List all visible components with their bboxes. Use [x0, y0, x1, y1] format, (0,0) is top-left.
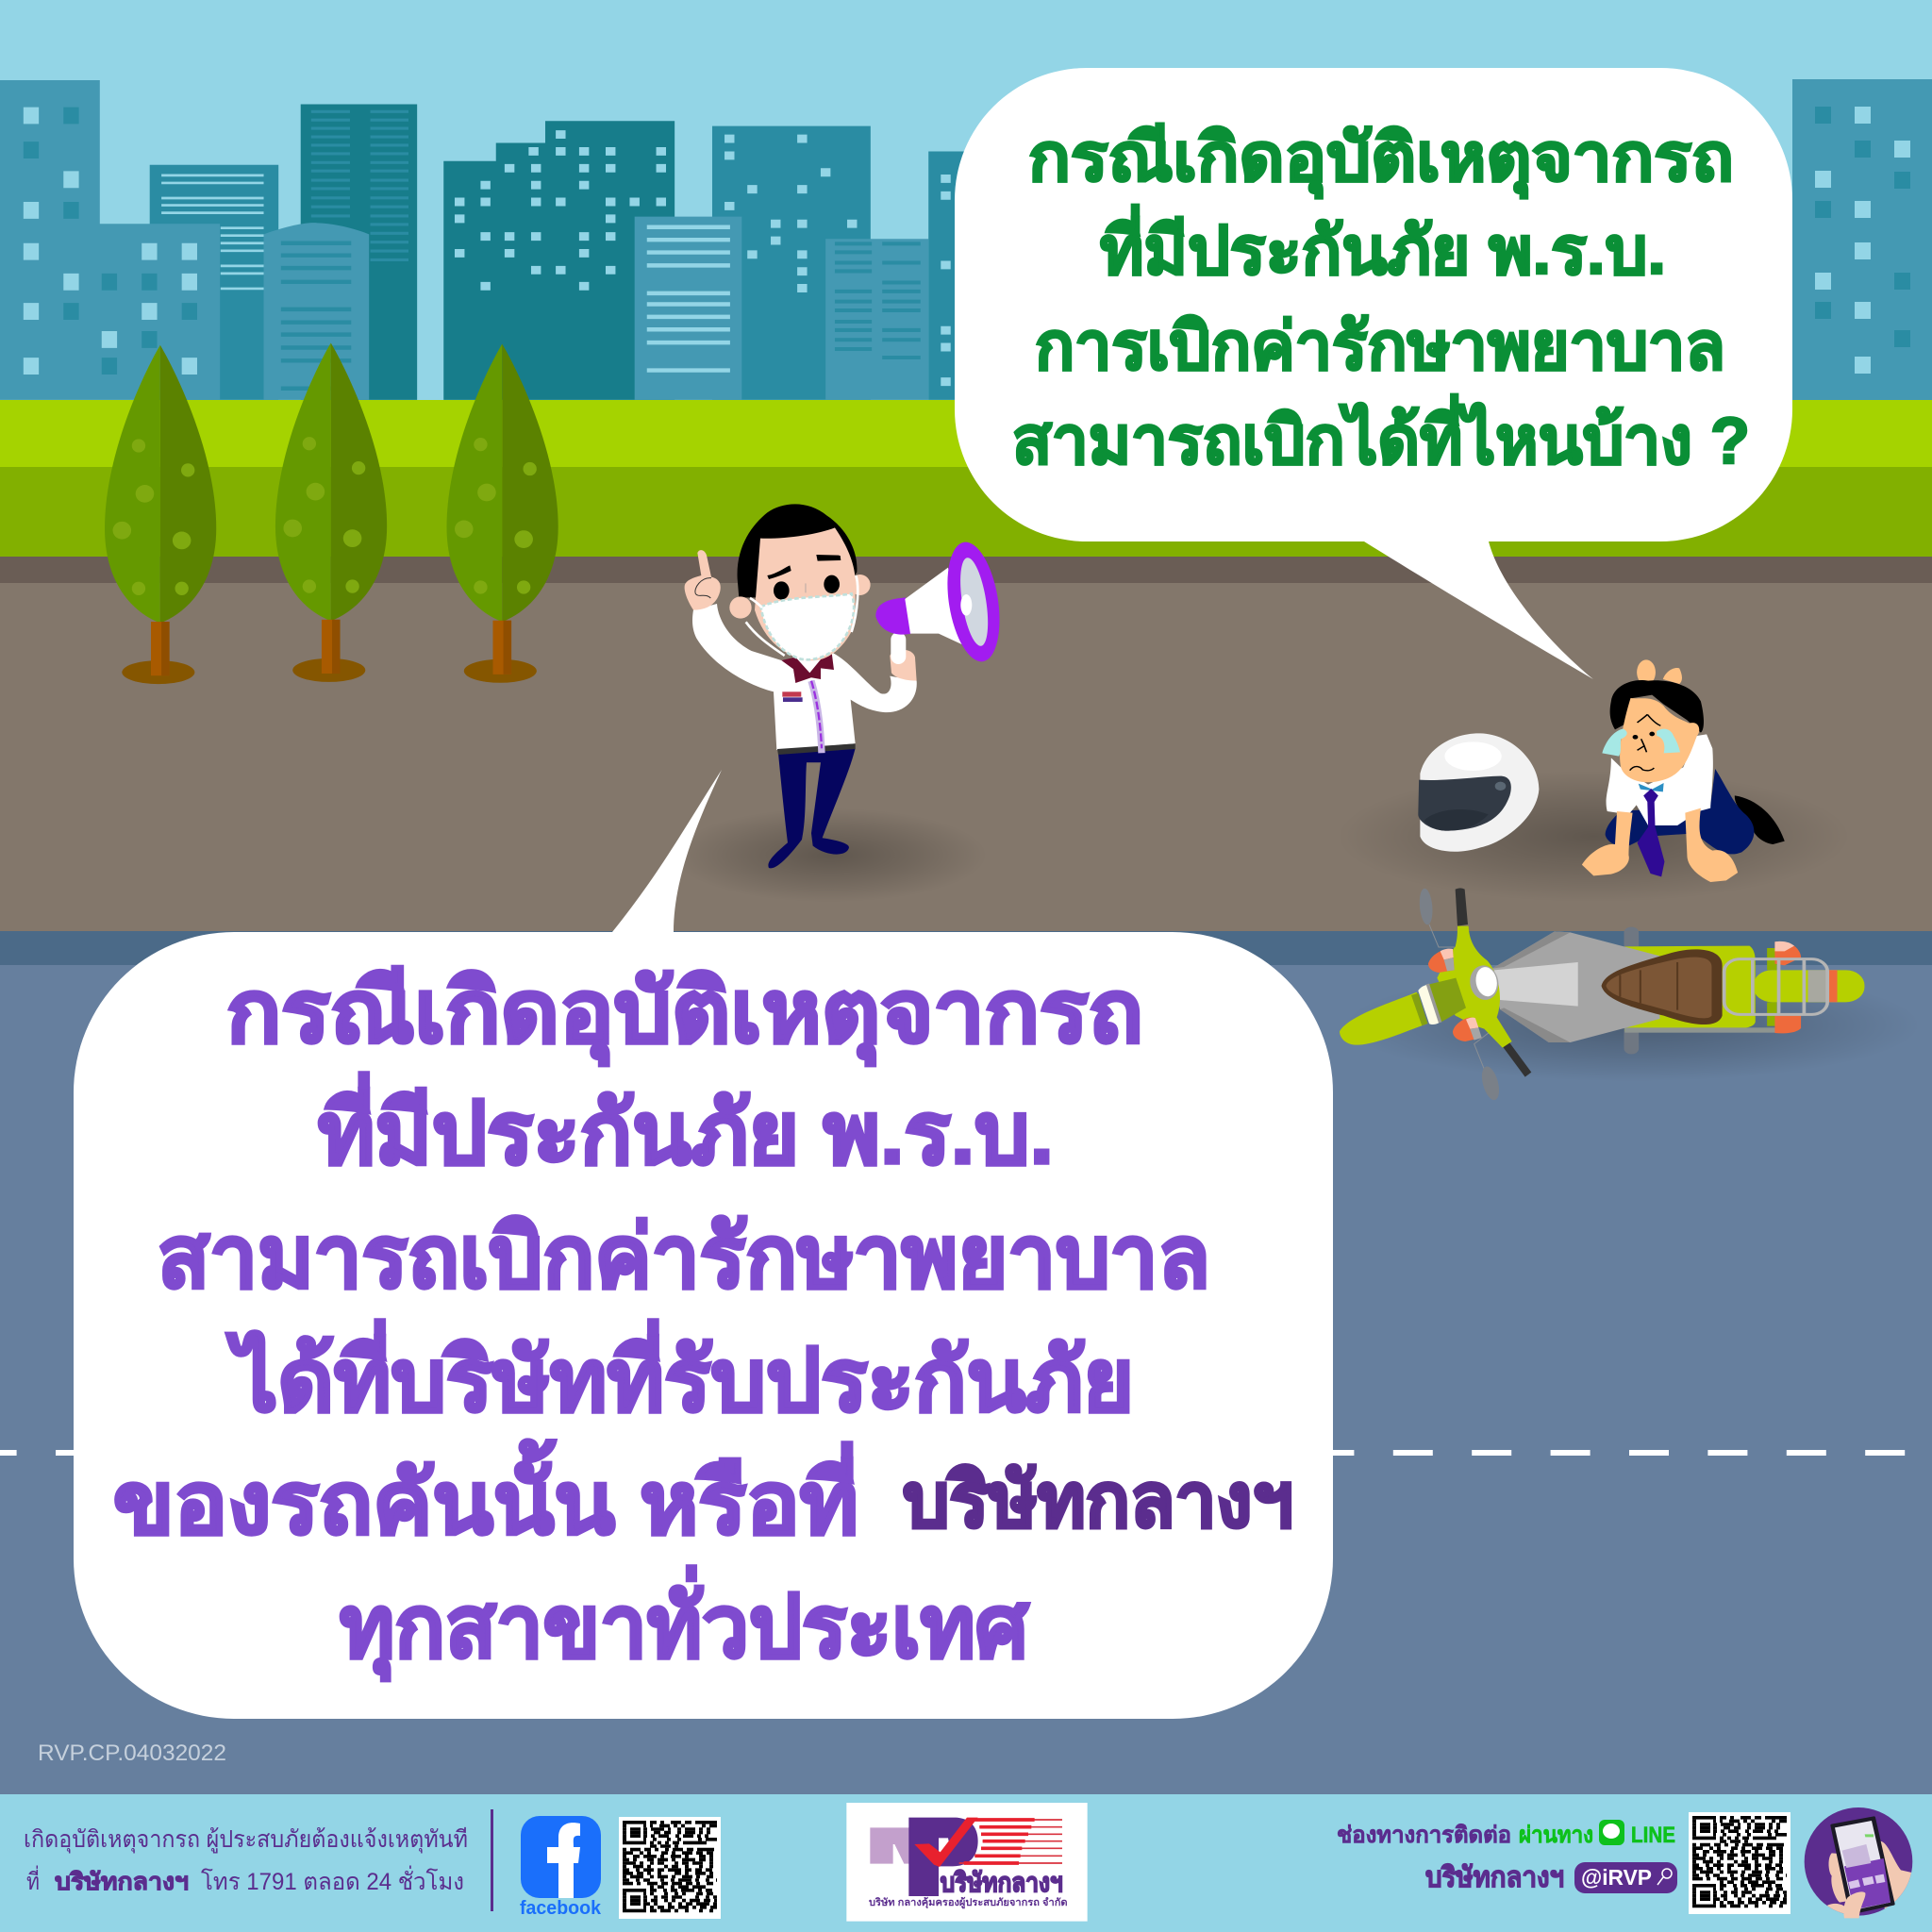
footer text: accident notice: ที่	[26, 1865, 40, 1895]
tree 3	[446, 343, 558, 683]
badge: iRVP: @iRVP	[1581, 1865, 1652, 1890]
building right	[1792, 79, 1932, 401]
tree 1	[105, 345, 216, 684]
logo letter R	[870, 1827, 912, 1864]
hand on handle	[890, 650, 917, 681]
QR code: facebook	[619, 1817, 721, 1919]
icon: phone in hand	[1805, 1807, 1912, 1920]
QR code: LINE	[1689, 1812, 1790, 1914]
question text	[1012, 121, 1750, 477]
footer text: accident notice: เกิดอุบัติเหตุจากรถ ผู้ประสบภัยต้องแจ้งเหตุทันที	[24, 1826, 468, 1854]
logo letter P	[908, 1818, 978, 1896]
answer text: ที่มีประกันภัย พ.ร.บ.	[318, 1072, 1054, 1182]
mask	[761, 593, 854, 659]
answer text	[113, 964, 1293, 1681]
footer text: contact via LINE	[1337, 1823, 1675, 1848]
shirt	[692, 604, 917, 750]
character: officer with megaphone	[673, 504, 1008, 903]
trousers	[768, 748, 856, 868]
background: sky	[0, 0, 1932, 406]
badge: iRVP	[1574, 1862, 1677, 1893]
question text: การเบิกค่ารักษาพยาบาล	[1035, 309, 1725, 383]
building group centre	[443, 121, 986, 400]
question text: ที่มีประกันภัย พ.ร.บ.	[1100, 204, 1666, 288]
city skyline	[0, 80, 986, 400]
logo subtitle: บริษัท กลางคุ้มครองผู้ประสบภัยจากรถ จำกัด	[869, 1896, 1068, 1909]
answer text: ของรถคันนั้น หรือที่	[113, 1440, 858, 1552]
answer text: กรณีเกิดอุบัติเหตุจากรถ	[226, 964, 1143, 1066]
trees	[105, 343, 558, 684]
grass	[0, 400, 1932, 558]
question text: กรณีเกิดอุบัติเหตุจากรถ	[1028, 121, 1734, 199]
motorcycle rear	[1492, 927, 1864, 1054]
raised hand	[685, 550, 721, 610]
logo check mark	[914, 1818, 978, 1867]
motorcycle shadow	[1344, 969, 1921, 1082]
speech bubble: answer	[74, 770, 1333, 1719]
footer text: accident notice: โทร 1791 ตลอด 24 ชั่วโมง	[201, 1865, 464, 1895]
answer text: บริษัทกลางฯ	[903, 1458, 1293, 1542]
crying man	[1582, 659, 1785, 882]
speech bubble: question	[955, 68, 1792, 679]
icon: facebook: facebook	[520, 1898, 602, 1919]
footer divider	[491, 1809, 493, 1911]
logo: RVP	[846, 1803, 1088, 1922]
footer text: contact via LINE: ผ่านทาง	[1519, 1823, 1593, 1848]
footer band	[0, 1794, 1932, 1932]
chest logo	[782, 691, 803, 702]
collar	[781, 653, 834, 683]
icon: LINE	[1599, 1820, 1624, 1845]
ground shadow	[673, 808, 988, 903]
belt	[777, 743, 856, 755]
answer text: สามารถเบิกค่ารักษาพยาบาล	[158, 1209, 1210, 1306]
footer text: accident notice: บริษัทกลางฯ	[55, 1869, 189, 1895]
building group left	[0, 80, 417, 400]
sidewalk	[0, 557, 1932, 932]
answer text: ทุกสาขาทั่วประเทศ	[340, 1565, 1030, 1681]
footer text: contact via LINE: LINE	[1631, 1823, 1675, 1848]
icon: facebook	[520, 1816, 602, 1919]
road lane dashes	[0, 1450, 1932, 1456]
reference code: RVP.CP.04032022	[38, 1740, 226, 1766]
logo name: บริษัทกลางฯ	[941, 1868, 1063, 1897]
helmet	[1418, 733, 1539, 852]
answer text: ได้ที่บริษัทที่รับประกันภัย	[225, 1319, 1134, 1429]
shirt placket	[811, 681, 822, 753]
question text: สามารถเบิกได้ที่ไหนบ้าง ?	[1012, 393, 1750, 477]
logo red stripes	[959, 1820, 1062, 1863]
head	[729, 504, 871, 660]
footer text: contact via LINE: ช่องทางการติดต่อ	[1337, 1823, 1511, 1848]
footer text: company name: บริษัทกลางฯ	[1425, 1862, 1564, 1893]
motorcycle front	[1340, 888, 1531, 1102]
ground shadow	[1337, 771, 1851, 903]
footer text: accident notice	[24, 1826, 468, 1895]
road	[0, 931, 1932, 1795]
megaphone	[875, 539, 1008, 665]
tree 2	[275, 343, 387, 682]
accident scene	[1337, 659, 1921, 1082]
